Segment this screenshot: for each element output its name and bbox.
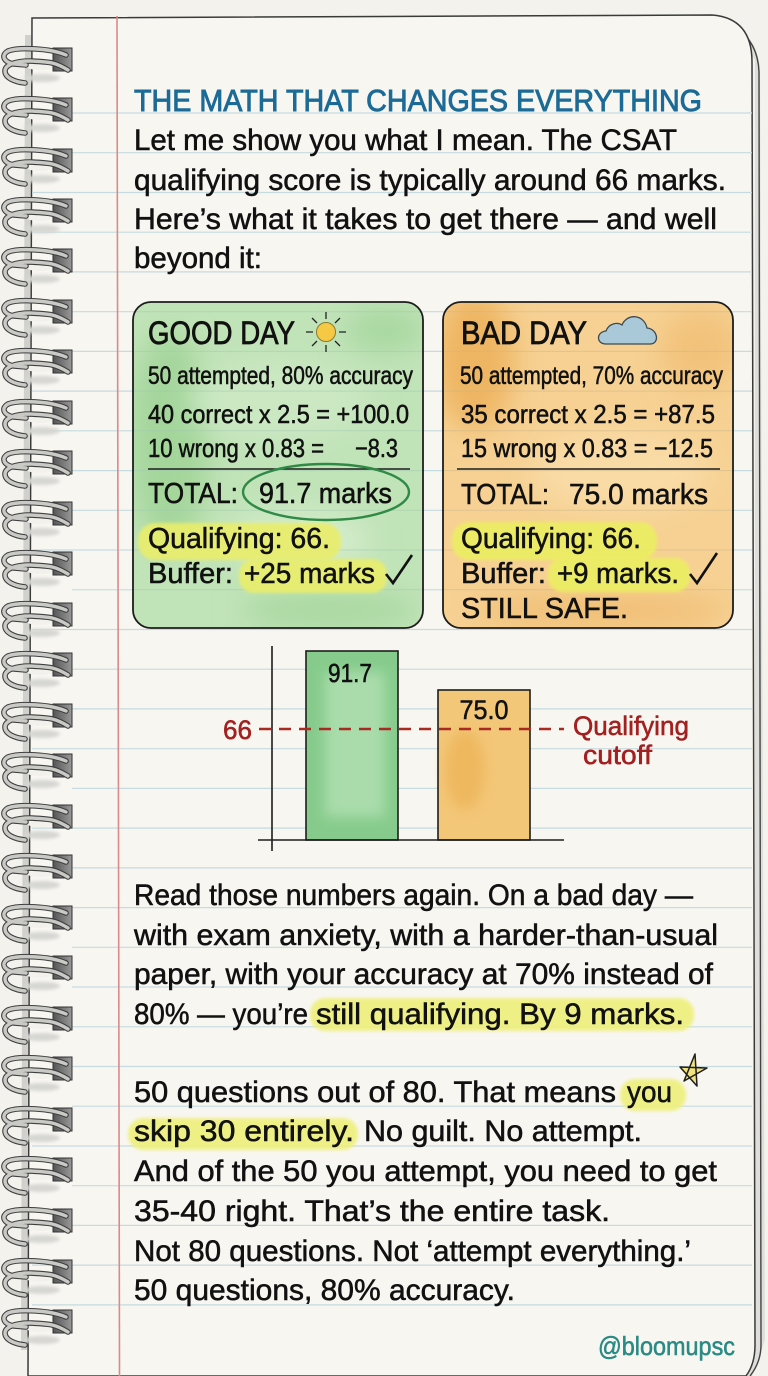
paragraph: fifty questions (128, 1076, 718, 1307)
good day calculation: −8.3 (355, 433, 398, 463)
good day calculation: 50 attempted, 80% accuracy (148, 362, 413, 390)
intro paragraph (134, 124, 726, 275)
good day calculation (148, 362, 413, 463)
bad day calculation (460, 362, 723, 463)
paragraph: read those numbers: with exam anxiety, with a harder-than-usual (133, 919, 718, 952)
total: good day: 91.7 marks (259, 478, 392, 510)
paragraph: fifty questions: Not 80 questions. Not ‘attempt everything.’ (134, 1235, 691, 1268)
qualifying, buffer and still safe: bad day (461, 523, 717, 625)
highlight: still qualifying (310, 998, 694, 1031)
highlight: you (620, 1079, 686, 1111)
qualifying, buffer and still safe: bad day: Qualifying: 66. (461, 523, 641, 555)
icon: sun (306, 312, 346, 352)
icon: star (680, 1054, 707, 1086)
total: bad day (461, 479, 708, 511)
margin line (117, 16, 120, 1376)
highlight: buffer (239, 559, 387, 593)
paragraph: fifty questions: No guilt. No attempt. (364, 1115, 642, 1148)
paragraph: fifty questions: 50 questions, 80% accuracy. (134, 1274, 515, 1307)
bar: good day 91.7 (306, 651, 398, 840)
heading: bad day: BAD DAY (461, 315, 587, 351)
qualifying, buffer and still safe: bad day: STILL SAFE. (461, 593, 628, 625)
total: bad day: 75.0 marks (569, 479, 708, 511)
highlight: buffer (548, 558, 690, 592)
axes (258, 646, 564, 851)
paragraph: fifty questions: And of the 50 you attempt, you need to get (134, 1155, 718, 1188)
bar: bad day 75.0: 75.0 (460, 695, 508, 725)
cutoff label: cutoff (583, 740, 653, 770)
total: bad day: TOTAL: (461, 479, 549, 511)
paragraph: read those numbers: Read those numbers again. On a bad day — (134, 879, 693, 912)
paragraph: read those numbers: still qualifying. By 9 marks. (316, 998, 684, 1031)
heading: good day: GOOD DAY (148, 315, 295, 351)
paragraph: fifty questions: skip 30 entirely. (134, 1115, 354, 1148)
total: good day (148, 464, 409, 520)
spiral binding (4, 48, 72, 1345)
good day calculation: 10 wrong x 0.83 = (148, 433, 324, 463)
intro paragraph: Here’s what it takes to get there — and well (134, 203, 717, 236)
intro paragraph: Let me show you what I mean. The CSAT (134, 124, 677, 157)
paragraph: fifty questions: 35-40 right. That’s the entire task. (134, 1195, 610, 1228)
paragraph: fifty questions: 50 questions out of 80. That means (134, 1076, 616, 1109)
panel: bad day (435, 290, 740, 628)
cutoff label (573, 711, 689, 770)
highlight: qualifying (452, 522, 657, 560)
bad day calculation: 50 attempted, 70% accuracy (460, 362, 723, 390)
bar chart (223, 646, 689, 851)
highlight: qualifying (138, 523, 341, 560)
qualifying, buffer and still safe: bad day: +9 marks. (557, 558, 679, 590)
cutoff label: Qualifying (573, 711, 689, 741)
intro paragraph: beyond it: (134, 242, 262, 275)
card border (443, 302, 733, 628)
qualifying, buffer and still safe: bad day: Buffer: (461, 558, 546, 590)
icon: cloud (598, 317, 656, 344)
bar: good day 91.7: 91.7 (328, 658, 372, 688)
paragraph: read those numbers: paper, with your accuracy at 70% instead of (134, 958, 714, 991)
qualifying and buffer: good day: +25 marks (244, 558, 375, 590)
cutoff line (259, 728, 564, 730)
cutoff value: 66 (223, 715, 252, 745)
qualifying and buffer: good day: Qualifying: 66. (148, 523, 330, 555)
total: good day: TOTAL: (148, 478, 238, 510)
card border (133, 302, 423, 628)
paragraph: read those numbers: 80% — you’re (134, 998, 308, 1031)
intro paragraph: qualifying score is typically around 66 marks. (134, 164, 726, 197)
bad day calculation: 15 wrong x 0.83 = −12.5 (461, 433, 713, 463)
title: THE MATH THAT CHANGES EVERYTHING (134, 83, 702, 118)
bar: bad day 75.0 (438, 690, 530, 840)
panel: good day (130, 302, 425, 628)
paragraph: fifty questions: you (627, 1076, 672, 1109)
handle credit: @bloomupsc (598, 1331, 735, 1361)
qualifying and buffer: good day (148, 523, 412, 590)
good day calculation: 40 correct x 2.5 = +100.0 (148, 399, 409, 429)
highlight: skip 30 entirely (128, 1118, 358, 1150)
paragraph: read those numbers (133, 879, 718, 1031)
qualifying and buffer: good day: Buffer: (148, 558, 233, 590)
bad day calculation: 35 correct x 2.5 = +87.5 (461, 399, 715, 429)
